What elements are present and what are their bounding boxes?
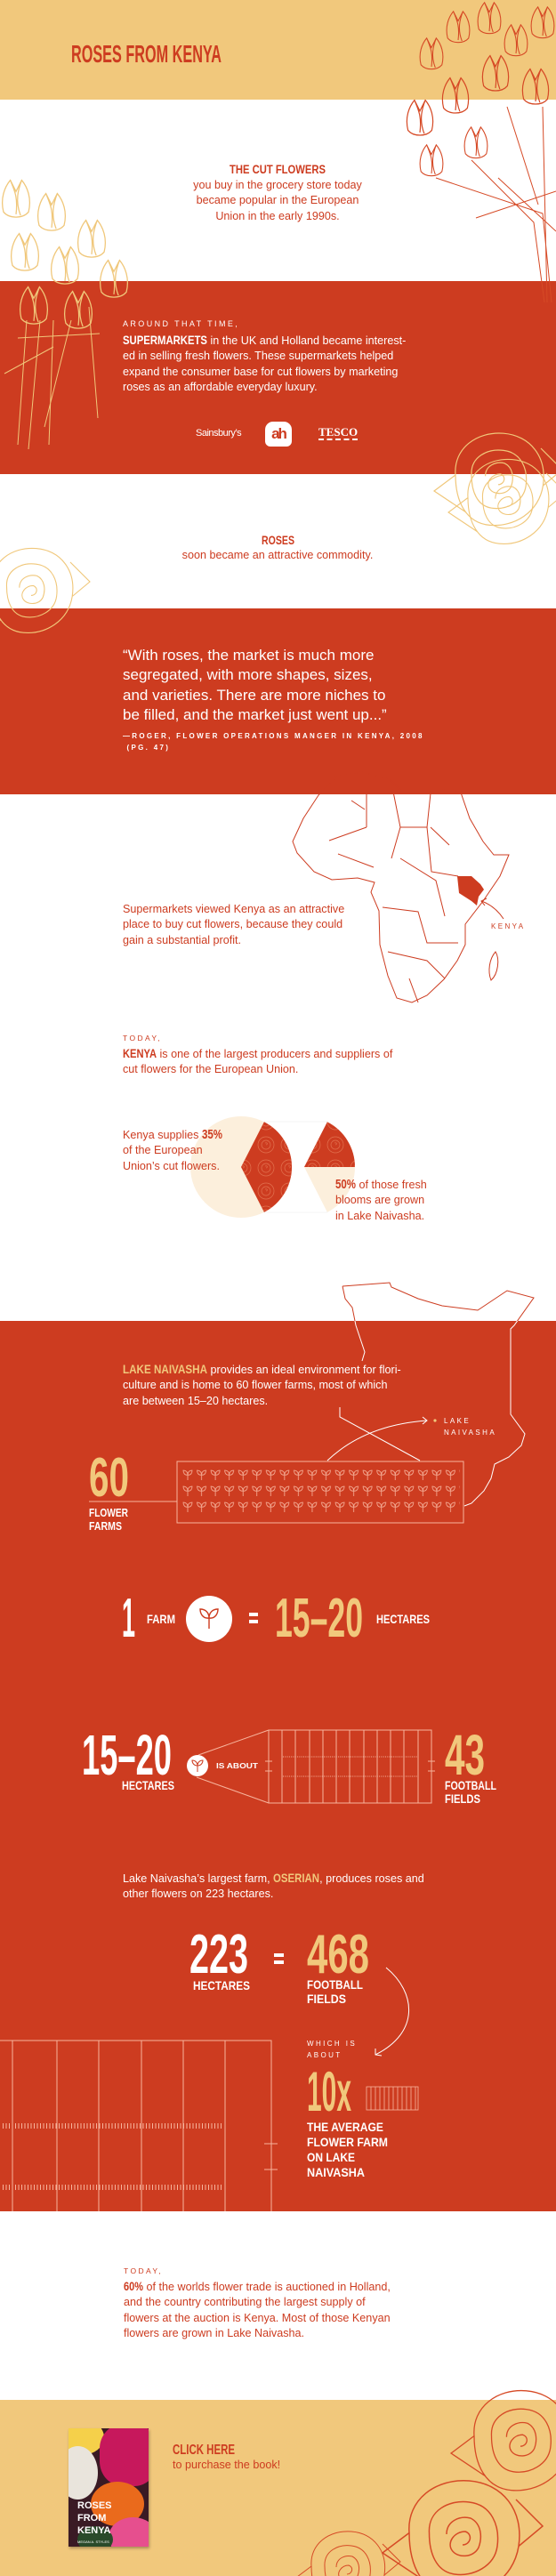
- text block: today kenya: KENYA: [123, 1046, 157, 1060]
- pie chart: 50%: [304, 1122, 355, 1212]
- text: 50% label: of those fresh: [359, 1179, 427, 1191]
- text block: today 60% holland: TODAY,: [124, 2266, 163, 2275]
- stat: 60 flower farms: FLOWER: [89, 1506, 128, 1519]
- farm grid: 60 sprouts: [89, 1461, 463, 1523]
- map: kenya highlighted: [457, 876, 484, 906]
- text block: lake naivasha: culture and is home to 60 flower farms, most of which: [123, 1379, 387, 1391]
- text block: oserian: OSERIAN: [273, 1871, 319, 1885]
- stat: 1 farm = 15-20 hectares: FARM: [147, 1612, 175, 1626]
- stat: 15-20 hectares is about 43 football fields: IS ABOUT: [216, 1762, 258, 1770]
- text: 35% label: 35%: [202, 1127, 222, 1142]
- quote: be filled, and the market just went up...”: [123, 706, 387, 723]
- stat: 60 flower farms: [89, 1447, 129, 1533]
- text: 35% label: of the European: [123, 1144, 203, 1156]
- map label: lake naivasha: NAIVASHA: [444, 1429, 496, 1437]
- text: 50% label: in Lake Naivasha.: [335, 1210, 424, 1222]
- quote: segregated, with more shapes, sizes,: [123, 666, 373, 683]
- stat: 15-20 hectares is about 43 football fields: [82, 1723, 496, 1806]
- text block: supermarkets: SUPERMARKETS: [123, 333, 207, 347]
- text block: supermarkets: in the UK and Holland became interest-: [210, 334, 406, 347]
- text block: today kenya: [123, 1034, 393, 1075]
- arrow: lake naivasha pointer: [327, 1417, 427, 1461]
- stat: 10x average farm: 10x: [307, 2061, 351, 2123]
- text block: the cut flowers body: Union in the early 1990s.: [215, 210, 340, 222]
- quote: —ROGER, FLOWER OPERATIONS MANGER IN KENYA, 2008: [123, 732, 424, 740]
- text block: today 60% holland: of the worlds flower trade is auctioned in Holland,: [146, 2281, 391, 2293]
- stat: 223 hectares = 468 football fields: 468: [307, 1924, 369, 1985]
- text block: kenya attractive: gain a substantial profit.: [123, 934, 241, 946]
- decoration: roses right: [434, 433, 556, 543]
- call to action text: to purchase the book!: [173, 2459, 280, 2471]
- label: which is about: [307, 2040, 357, 2058]
- stat: 223 hectares = 468 football fields: HECTARES: [193, 1978, 250, 1992]
- stat: 10x average farm: NAIVASHA: [307, 2165, 365, 2179]
- text block: lake naivasha: LAKE NAIVASHA: [123, 1362, 207, 1376]
- icon: equals sign: [249, 1613, 258, 1623]
- text block: supermarkets: AROUND THAT TIME,: [123, 319, 239, 328]
- stat: 10x average farm: THE AVERAGE: [307, 2120, 383, 2134]
- icon: small football field: [367, 2087, 418, 2110]
- stat: 10x average farm: FLOWER FARM: [307, 2135, 388, 2149]
- text block: today 60% holland: flowers at the auction is Kenya. Most of those Kenyan: [124, 2312, 391, 2324]
- background: lake naivasha band: [0, 1321, 556, 2211]
- text block: kenya attractive: Supermarkets viewed Kenya as an attractive: [123, 903, 344, 915]
- text block: lake naivasha: are between 15–20 hectares.: [123, 1395, 268, 1407]
- text block: oserian: [123, 1871, 424, 1900]
- map: kenya outline with lake: [340, 1283, 534, 1506]
- stat: 60 flower farms: FARMS: [89, 1519, 122, 1533]
- quote: [123, 647, 424, 752]
- stat: 1 farm = 15-20 hectares: [122, 1588, 430, 1649]
- chart: football field 43: [265, 1730, 435, 1803]
- text block: the cut flowers body: [193, 179, 362, 222]
- stat: 15-20 hectares is about 43 football fields: FIELDS: [445, 1791, 480, 1806]
- text block: the cut flowers body: you buy in the grocery store today: [193, 179, 362, 191]
- background: supermarkets band: [0, 281, 556, 474]
- stat: 1 farm = 15-20 hectares: HECTARES: [376, 1612, 430, 1626]
- map: africa: [293, 772, 509, 1002]
- text block: lake naivasha: [123, 1362, 401, 1407]
- icon: equals sign 2: [274, 1953, 284, 1964]
- stat: 10x average farm: ON LAKE: [307, 2150, 355, 2164]
- text block: kenya attractive: place to buy cut flowers, because they could: [123, 918, 342, 930]
- decoration: top-right tulip bouquet: [407, 3, 556, 302]
- map label: lake naivasha: LAKE: [444, 1417, 471, 1425]
- arrow: kenya label: [481, 898, 504, 919]
- text block: kenya attractive: [123, 903, 344, 946]
- quote: “With roses, the market is much more: [123, 647, 374, 664]
- book cover: MEGAN A. STYLES: [77, 2540, 109, 2544]
- decoration: left tulip bouquet: [3, 181, 127, 449]
- text: 35% label: [123, 1127, 222, 1172]
- stat: 1 farm = 15-20 hectares: 15–20: [275, 1588, 363, 1649]
- text: 50% label: 50%: [335, 1177, 356, 1192]
- heading: click here: CLICK HERE: [173, 2443, 235, 2458]
- pie chart: 35%: [190, 1116, 327, 1218]
- text block: roses commodity: soon became an attractive commodity.: [182, 549, 373, 561]
- book cover: [68, 2428, 149, 2547]
- book cover: FROM: [77, 2513, 106, 2524]
- stat: 15-20 hectares is about 43 football fields: 43: [445, 1723, 485, 1787]
- text block: today 60% holland: flowers are grown in Lake Naivasha.: [124, 2327, 304, 2339]
- logo: albert heijn: ah: [271, 425, 286, 442]
- text block: oserian: other flowers on 223 hectares.: [123, 1888, 273, 1900]
- chart: large football field: [0, 2041, 278, 2211]
- stat: 15-20 hectares is about 43 football fields: FOOTBALL: [445, 1778, 496, 1792]
- quote: and varieties. There are more niches to: [123, 687, 385, 704]
- map label: kenya: KENYA: [491, 922, 526, 930]
- text block: supermarkets: roses as an affordable everyday luxury.: [123, 381, 318, 393]
- text block: the cut flowers body: became popular in the European: [197, 194, 359, 206]
- logo: tesco: TESCO: [318, 425, 358, 439]
- stat: 15-20 hectares is about 43 football fields: 15–20: [82, 1723, 172, 1787]
- logo: sainsbury's: Sainsbury’s: [196, 428, 241, 439]
- stat: 223 hectares = 468 football fields: 223: [189, 1924, 248, 1985]
- text block: oserian: Lake Naivasha’s largest farm, , produces roses and: [123, 1872, 424, 1885]
- text block: supermarkets: ed in selling fresh flowers. These supermarkets helped: [123, 350, 393, 362]
- background: header band: [0, 0, 556, 100]
- label: which is about: WHICH IS: [307, 2040, 357, 2048]
- arrow: curved to 10x: [375, 1968, 409, 2056]
- icon: small farm circle with field lines: [187, 1730, 269, 1803]
- text: 50% label: blooms are grown: [335, 1194, 424, 1206]
- stat: 223 hectares = 468 football fields: FIELDS: [307, 1992, 346, 2006]
- book cover: KENYA: [77, 2525, 110, 2536]
- stat: 15-20 hectares is about 43 football fields: HECTARES: [122, 1778, 174, 1792]
- title: ROSES FROM KENYA: [71, 40, 222, 68]
- text block: supermarkets: expand the consumer base for cut flowers by marketing: [123, 366, 398, 378]
- decoration: rose left: [0, 548, 90, 632]
- stat: 10x average farm: [307, 2061, 388, 2179]
- background: footer band: [0, 2400, 556, 2576]
- text block: lake naivasha: provides an ideal environment for flori-: [210, 1364, 401, 1376]
- stat: 1 farm = 15-20 hectares: 1: [122, 1588, 135, 1649]
- heading: the cut flowers: THE CUT FLOWERS: [230, 162, 326, 176]
- text block: supermarkets: [123, 319, 406, 393]
- text block: today 60% holland: and the country contributing the largest supply of: [124, 2296, 366, 2308]
- text block: today kenya: TODAY,: [123, 1034, 162, 1042]
- label: which is about: ABOUT: [307, 2051, 342, 2058]
- text block: today 60% holland: 60%: [124, 2279, 143, 2293]
- text: 35% label: Union’s cut flowers.: [123, 1160, 220, 1172]
- text: 35% label: Kenya supplies: [123, 1129, 198, 1141]
- decoration: footer roses: [294, 2391, 556, 2576]
- map label: lake naivasha: [444, 1417, 496, 1437]
- text: 50% label: [335, 1177, 427, 1222]
- stat: 60 flower farms: 60: [89, 1447, 129, 1509]
- stat: 223 hectares = 468 football fields: [189, 1924, 369, 2006]
- heading: roses: ROSES: [262, 533, 294, 547]
- text block: today kenya: cut flowers for the European Union.: [123, 1063, 298, 1075]
- text block: today kenya: is one of the largest producers and suppliers of: [159, 1048, 392, 1060]
- logos: supermarkets: [196, 422, 358, 447]
- background: quote band: [0, 608, 556, 794]
- book cover: ROSES: [77, 2500, 112, 2511]
- logo: albert heijn: [265, 422, 292, 447]
- stat: 223 hectares = 468 football fields: FOOTBALL: [307, 1977, 363, 1992]
- icon: farm circle: [186, 1596, 232, 1642]
- quote: (PG. 47): [127, 744, 170, 752]
- text block: today 60% holland: [124, 2266, 391, 2339]
